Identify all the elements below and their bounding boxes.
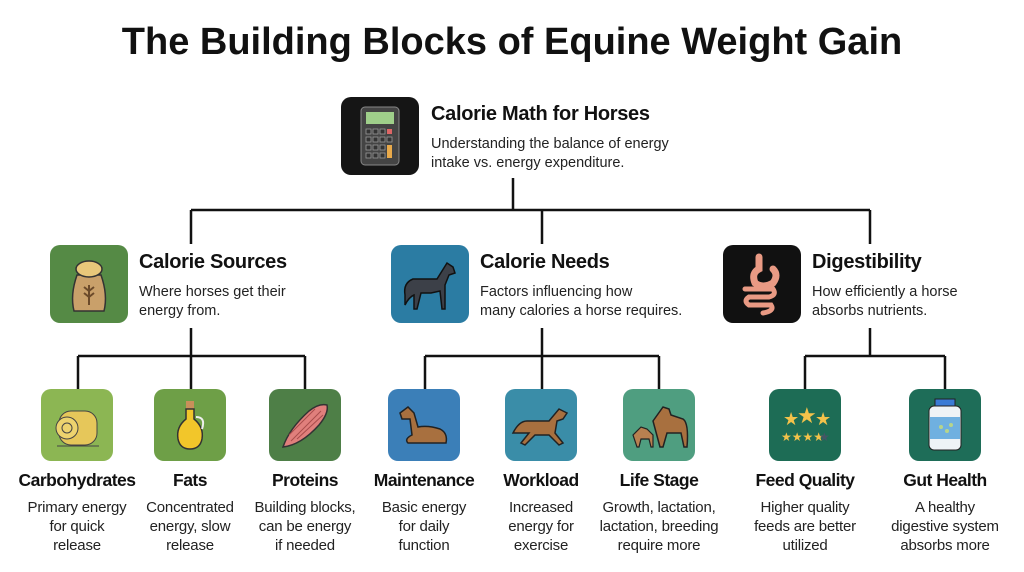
leaf: workload: Workload [503, 470, 579, 490]
leaf: workload [503, 389, 579, 554]
description: Where horses get their [139, 284, 286, 300]
icon: mare and foal [623, 389, 695, 461]
description: How efficiently a horse [812, 284, 958, 300]
leaf: maintenance: Basic energy [382, 499, 466, 516]
icon: oil bottle [154, 389, 226, 461]
leaf: maintenance: for daily [399, 518, 449, 535]
leaf: carbohydrates: for quick [50, 518, 104, 535]
icon: stars [769, 389, 841, 461]
icon: running horse [505, 389, 577, 461]
description [139, 284, 286, 319]
description: Understanding the balance of energy [431, 136, 669, 152]
description: energy from. [139, 303, 220, 319]
panel: calorie sources [50, 245, 287, 323]
leaf: gut health: A healthy [915, 499, 975, 516]
leaf: feed quality: feeds are better [754, 518, 856, 535]
leaf: gut health: digestive system [891, 518, 999, 535]
leaf: proteins: can be energy [259, 518, 351, 535]
heading: Calorie Needs [480, 251, 610, 273]
description: absorbs nutrients. [812, 303, 927, 319]
leaf: carbohydrates: Primary energy [28, 499, 126, 516]
heading: Calorie Math for Horses [431, 103, 650, 125]
description: intake vs. energy expenditure. [431, 155, 624, 171]
leaf: fats: energy, slow [150, 518, 230, 535]
leaf: proteins [254, 389, 356, 554]
leaf: maintenance: function [399, 537, 449, 554]
icon: stomach [723, 245, 801, 323]
panel: digestibility [723, 245, 958, 323]
icon: stars: ★ [783, 409, 799, 430]
leaf: carbohydrates: release [53, 537, 101, 554]
leaf: fats: release [166, 537, 214, 554]
leaf: proteins: if needed [275, 537, 335, 554]
leaf: carbohydrates [18, 389, 136, 554]
leaf: workload: energy for [508, 518, 574, 535]
description: Factors influencing how [480, 284, 632, 300]
icon: sack [50, 245, 128, 323]
leaf: fats: Fats [173, 470, 207, 490]
heading: Digestibility [812, 251, 921, 273]
icon: stars: ★ [797, 404, 817, 429]
heading: Calorie Sources [139, 251, 287, 273]
description [812, 284, 958, 319]
leaf: workload: exercise [514, 537, 568, 554]
icon: stars: ★ [819, 430, 830, 444]
leaf: workload: Increased [509, 499, 573, 516]
leaf: life stage: require more [618, 537, 700, 554]
icon: stars: ★ [815, 409, 831, 430]
icon: supplement jar [909, 389, 981, 461]
icon: resting horse [388, 389, 460, 461]
leaf: maintenance: Maintenance [374, 470, 474, 490]
leaf: life stage: Life Stage [620, 470, 698, 490]
leaf: life stage: lactation, breeding [600, 518, 718, 535]
icon: calculator [341, 97, 419, 175]
leaf: feed quality: utilized [782, 537, 828, 554]
leaf: gut health: Gut Health [903, 470, 987, 490]
leaf: life stage [600, 389, 718, 554]
description: many calories a horse requires. [480, 303, 682, 319]
description [480, 284, 682, 319]
description [431, 136, 669, 171]
icon: stars: ★★★★ [781, 430, 824, 444]
leaf: gut health [891, 389, 999, 554]
icon: hay bale [41, 389, 113, 461]
leaf: feed quality: Feed Quality [755, 470, 855, 490]
leaf: carbohydrates: Carbohydrates [18, 470, 136, 490]
leaf: life stage: Growth, lactation, [602, 499, 716, 516]
leaf: fats: Concentrated [146, 499, 234, 516]
top node: calorie math [341, 97, 669, 175]
leaf: proteins: Building blocks, [254, 499, 356, 516]
leaf: feed quality [754, 389, 856, 554]
leaf: proteins: Proteins [272, 470, 338, 490]
leaf: fats [146, 389, 234, 554]
leaf: feed quality: Higher quality [761, 499, 849, 516]
icon: muscle [269, 389, 341, 461]
leaf: gut health: absorbs more [900, 537, 990, 554]
icon: horse [391, 245, 469, 323]
leaf: maintenance [374, 389, 474, 554]
title: The Building Blocks of Equine Weight Gain [122, 21, 902, 63]
panel: calorie needs [391, 245, 682, 323]
